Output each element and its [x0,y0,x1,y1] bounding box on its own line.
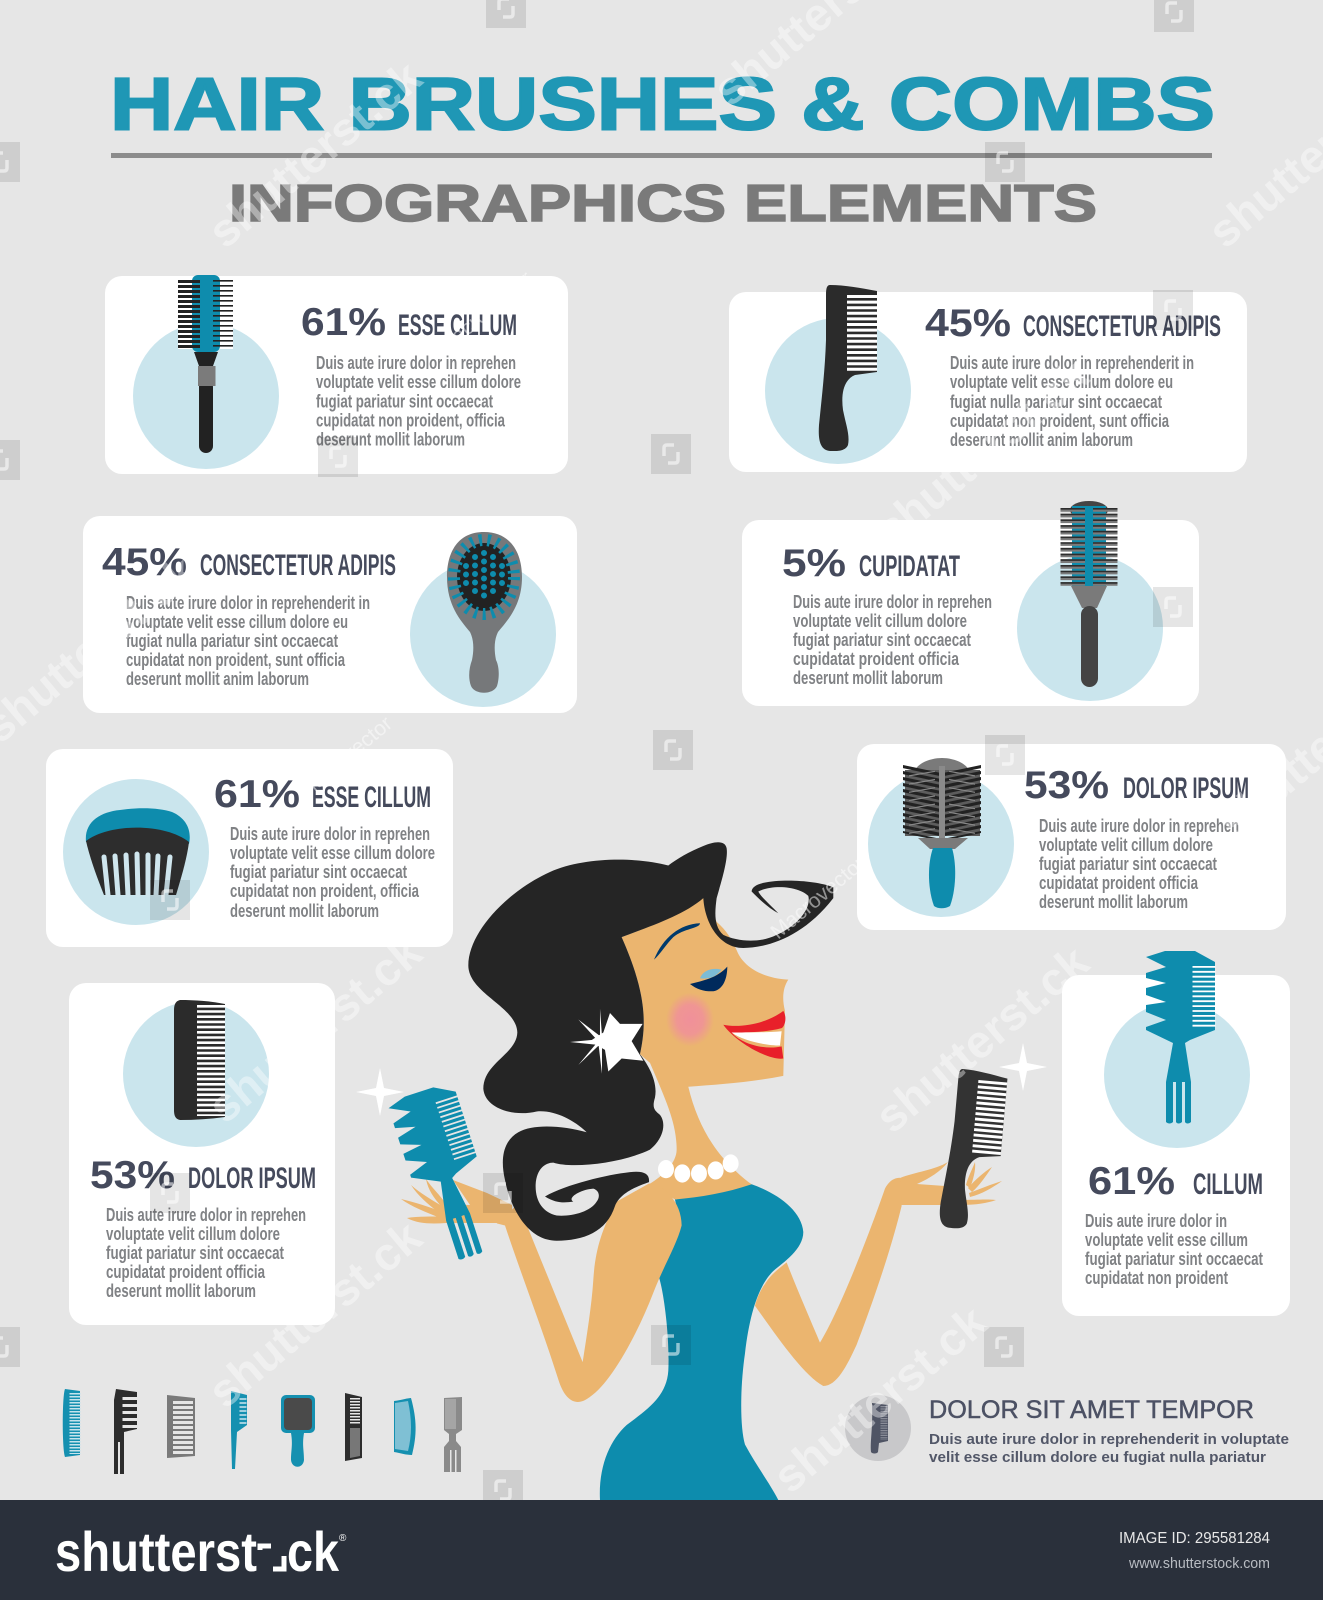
stat heading: 53% [90,1154,175,1197]
dress [600,1184,803,1500]
body text [793,592,992,688]
callout: dolor sit amet tempor [845,1395,1289,1466]
body text: fugiat pariatur sint occaecat [1085,1249,1263,1269]
stat heading: 61% [1088,1160,1175,1203]
body text: fugiat pariatur sint occaecat [1039,854,1217,874]
icon: small blue comb [63,1389,80,1457]
icon: wide comb [86,808,190,895]
icon: black comb with handle [819,285,877,451]
body text: cupidatat proident officia [793,649,960,669]
panel: 61% esse cillum left [46,749,453,947]
body text: voluptate velit esse cillum dolore [230,843,435,863]
blush [666,993,714,1046]
body text: voluptate velit esse cillum dolore eu [126,612,348,632]
eye [690,967,727,991]
icon: grey circle with comb [845,1395,911,1461]
body and hair [468,842,902,1500]
teeth [732,1031,782,1046]
stat heading: 45% [925,302,1011,345]
face and neck [622,896,788,1199]
label: CONSECTETUR ADIPIS [200,549,396,582]
label: ESSE CILLUM [312,781,431,814]
footer logo: ck [287,1520,340,1583]
icon: small grey comb [167,1395,195,1458]
body text: fugiat pariatur sint occaecat [316,392,493,412]
icon: small blue tail comb [231,1391,247,1469]
body text: deserunt mollit laborum [106,1281,256,1301]
body text [126,593,370,689]
watermark: shutterst.ck [865,348,1098,556]
panel: 53% dolor ipsum left [69,983,335,1325]
icon: blue fork comb [1146,951,1215,1124]
body text: deserunt mollit anim laborum [126,669,309,689]
watermark: Macrovector [766,852,870,944]
left arm [497,1183,682,1402]
body text [950,353,1194,450]
stat heading: 53% [1024,764,1109,807]
label: CILLUM [1193,1168,1263,1201]
body text: deserunt mollit laborum [793,668,943,688]
body text: cupidatat non proident, officia [316,410,506,430]
website: www.shutterstock.com [1128,1555,1270,1572]
callout text: Duis aute irure dolor in reprehenderit in voluptate [929,1431,1289,1448]
footer logo: shutterst [55,1520,257,1583]
icon: small black pick comb [114,1389,137,1474]
subtitle: INFOGRAPHICS ELEMENTS [229,175,1097,233]
body text: cupidatat non proident, sunt officia [950,411,1170,431]
left hand [401,1179,512,1223]
watermark: shutterst.ck [763,1295,996,1503]
icon: small dark comb [345,1393,362,1461]
stat heading: 45% [102,541,187,584]
icon: round brush blue [178,275,233,453]
label: CUPIDATAT [859,550,960,583]
body text [230,824,435,921]
right hand [897,1162,1002,1205]
label: ESSE CILLUM [398,309,517,342]
body text: voluptate velit esse cillum dolore eu [950,372,1173,392]
stat heading: 61% [214,773,300,816]
body text: cupidatat non proident, officia [230,881,420,901]
image id: IMAGE ID: 295581284 [1119,1530,1270,1547]
body text: cupidatat non proident [1085,1268,1228,1288]
eyebrow [654,923,700,960]
body text: voluptate velit cillum dolore [106,1224,280,1244]
body text: deserunt mollit laborum [1039,892,1188,912]
callout heading: DOLOR SIT AMET TEMPOR [929,1396,1254,1424]
body text: cupidatat non proident, sunt officia [126,650,346,670]
right hand comb [938,1068,1008,1232]
body text: Duis aute irure dolor in [1085,1211,1227,1231]
panel: 45% consectetur top right [729,285,1247,472]
body text: Duis aute irure dolor in reprehen [106,1205,306,1225]
earring star [570,1009,643,1074]
body text: fugiat pariatur sint occaecat [793,630,971,650]
illustration: woman with combs [356,842,1047,1500]
body text: fugiat pariatur sint occaecat [230,862,407,882]
icon: oval paddle brush [447,532,522,693]
stat heading: 61% [301,301,386,344]
body text: Duis aute irure dolor in reprehen [316,353,516,373]
watermark: Macrovector [433,267,537,359]
body text: voluptate velit cillum dolore [793,611,967,631]
body text [316,353,521,450]
footer logo: ® [339,1533,347,1544]
watermark: Macrovector [293,712,397,804]
footer bar [0,1500,1323,1600]
sparkle left [356,1068,404,1116]
icon: spiked round brush [905,758,980,908]
panel: 61% cillum right [1062,951,1290,1316]
body text [1085,1211,1263,1288]
row of small combs [63,1389,462,1474]
title: HAIR BRUSHES & COMBS [110,62,1215,146]
body text: deserunt mollit laborum [316,430,465,450]
body text: voluptate velit esse cillum [1085,1230,1248,1250]
watermark: shutterst.ck [198,50,431,258]
mouth [723,1011,785,1059]
sparkle right [999,1043,1047,1091]
icon: vented round brush [1070,501,1108,687]
panel: 53% dolor ipsum right [857,744,1286,930]
callout text: velit esse cillum dolore eu fugiat nulla pariatur [929,1449,1266,1466]
body text: Duis aute irure dolor in reprehenderit in [950,353,1194,373]
body text: fugiat nulla pariatur sint occaecat [950,392,1162,412]
body text: deserunt mollit laborum [230,901,379,921]
body text: cupidatat proident officia [106,1262,266,1282]
body text [106,1205,306,1301]
title rule [111,153,1212,158]
left hand comb [387,1081,506,1267]
body text: Duis aute irure dolor in reprehen [793,592,992,612]
stat heading: 5% [782,542,846,585]
icon: black straight comb [174,1000,225,1120]
icon: small curved blue comb [394,1398,416,1455]
panel: 45% consectetur left [83,516,577,713]
icon: small paddle brush [281,1395,315,1467]
body text: Duis aute irure dolor in reprehen [230,824,430,844]
body text: fugiat pariatur sint occaecat [106,1243,284,1263]
necklace [658,1154,739,1183]
panel: 5% cupidatat [742,501,1199,706]
right arm [755,1178,902,1386]
body text: deserunt mollit anim laborum [950,430,1133,450]
body text: Duis aute irure dolor in reprehenderit in [126,593,370,613]
watermark: shutterst.ck [198,1210,431,1418]
hair [468,842,833,1241]
body text: fugiat nulla pariatur sint occaecat [126,631,338,651]
panel: 61% esse cillum top [105,275,568,474]
callout text [929,1431,1289,1466]
body text: Duis aute irure dolor in reprehen [1039,816,1239,836]
body text: voluptate velit esse cillum dolore [316,372,521,392]
body text [1039,816,1239,912]
label: DOLOR IPSUM [188,1162,316,1195]
watermark: shutterst.ck [865,935,1098,1143]
body text: voluptate velit cillum dolore [1039,835,1213,855]
watermark: shutterst.ck [198,925,431,1133]
eyeshadow [700,969,722,979]
icon: small grey pick comb [444,1397,462,1472]
body text: cupidatat proident officia [1039,873,1199,893]
